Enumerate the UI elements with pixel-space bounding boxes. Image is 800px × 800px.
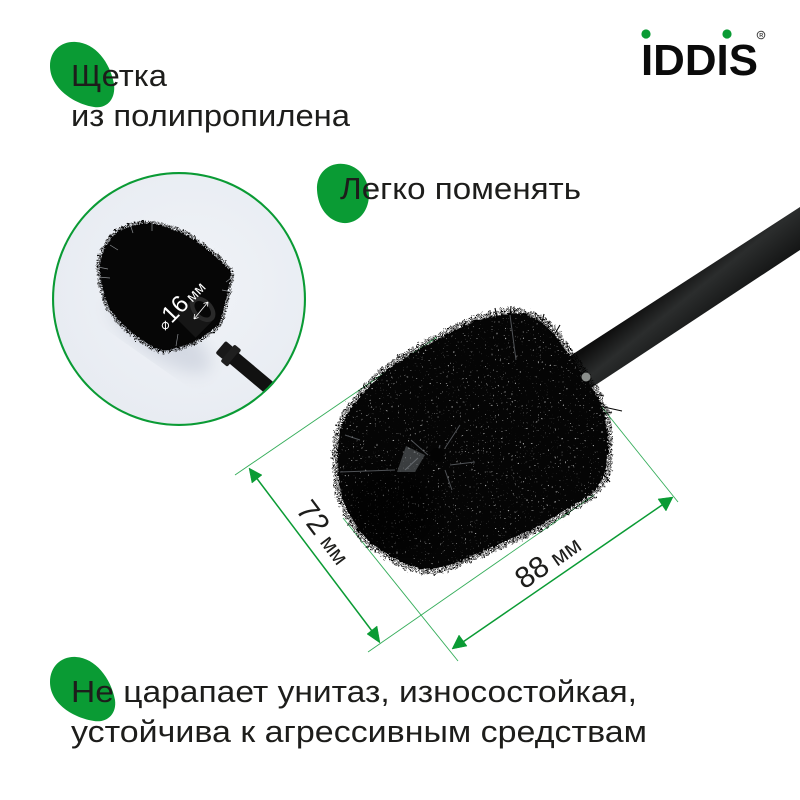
label: easy to replace: Легко поменять bbox=[340, 171, 581, 206]
text: benefits bbox=[71, 674, 647, 749]
texture: bristle tips bbox=[338, 314, 607, 566]
label: 72 mm: 72мм bbox=[289, 494, 358, 571]
collar with hole bbox=[175, 296, 216, 338]
shadow bbox=[109, 310, 212, 376]
text: benefits: устойчива к агрессивным средствам bbox=[71, 714, 647, 749]
logo: IDDIS: IDDIS bbox=[641, 36, 758, 85]
icon: small brush head bbox=[96, 220, 274, 393]
blob: heading accent bbox=[50, 42, 114, 107]
chart: dimension guide lines bbox=[235, 337, 678, 661]
label: diameter 16 mm: ⌀16мм bbox=[150, 273, 211, 335]
icon: threaded rod bbox=[216, 342, 274, 393]
circle outline bbox=[52, 172, 306, 426]
icon: large brush head bbox=[330, 305, 622, 575]
arrow: 88 mm bbox=[452, 497, 673, 649]
icon: brush handle bbox=[570, 207, 800, 392]
blob: bottom text accent bbox=[50, 657, 115, 721]
label: 88 mm: 88мм bbox=[509, 527, 587, 596]
heading: brush material bbox=[71, 58, 351, 133]
arrow: inner diameter bbox=[194, 302, 208, 319]
heading: brush material: Щетка bbox=[71, 58, 168, 93]
screw bbox=[582, 372, 590, 382]
heading: brush material: из полипропилена bbox=[71, 98, 351, 133]
blob: easy replacement accent bbox=[317, 164, 369, 223]
text: benefits: Не царапает унитаз, износостойкая, bbox=[71, 674, 637, 709]
logo: IDDIS: R bbox=[759, 33, 763, 39]
panel: circular inset with brush head bbox=[50, 172, 800, 749]
arrow: 72 mm bbox=[249, 468, 380, 643]
